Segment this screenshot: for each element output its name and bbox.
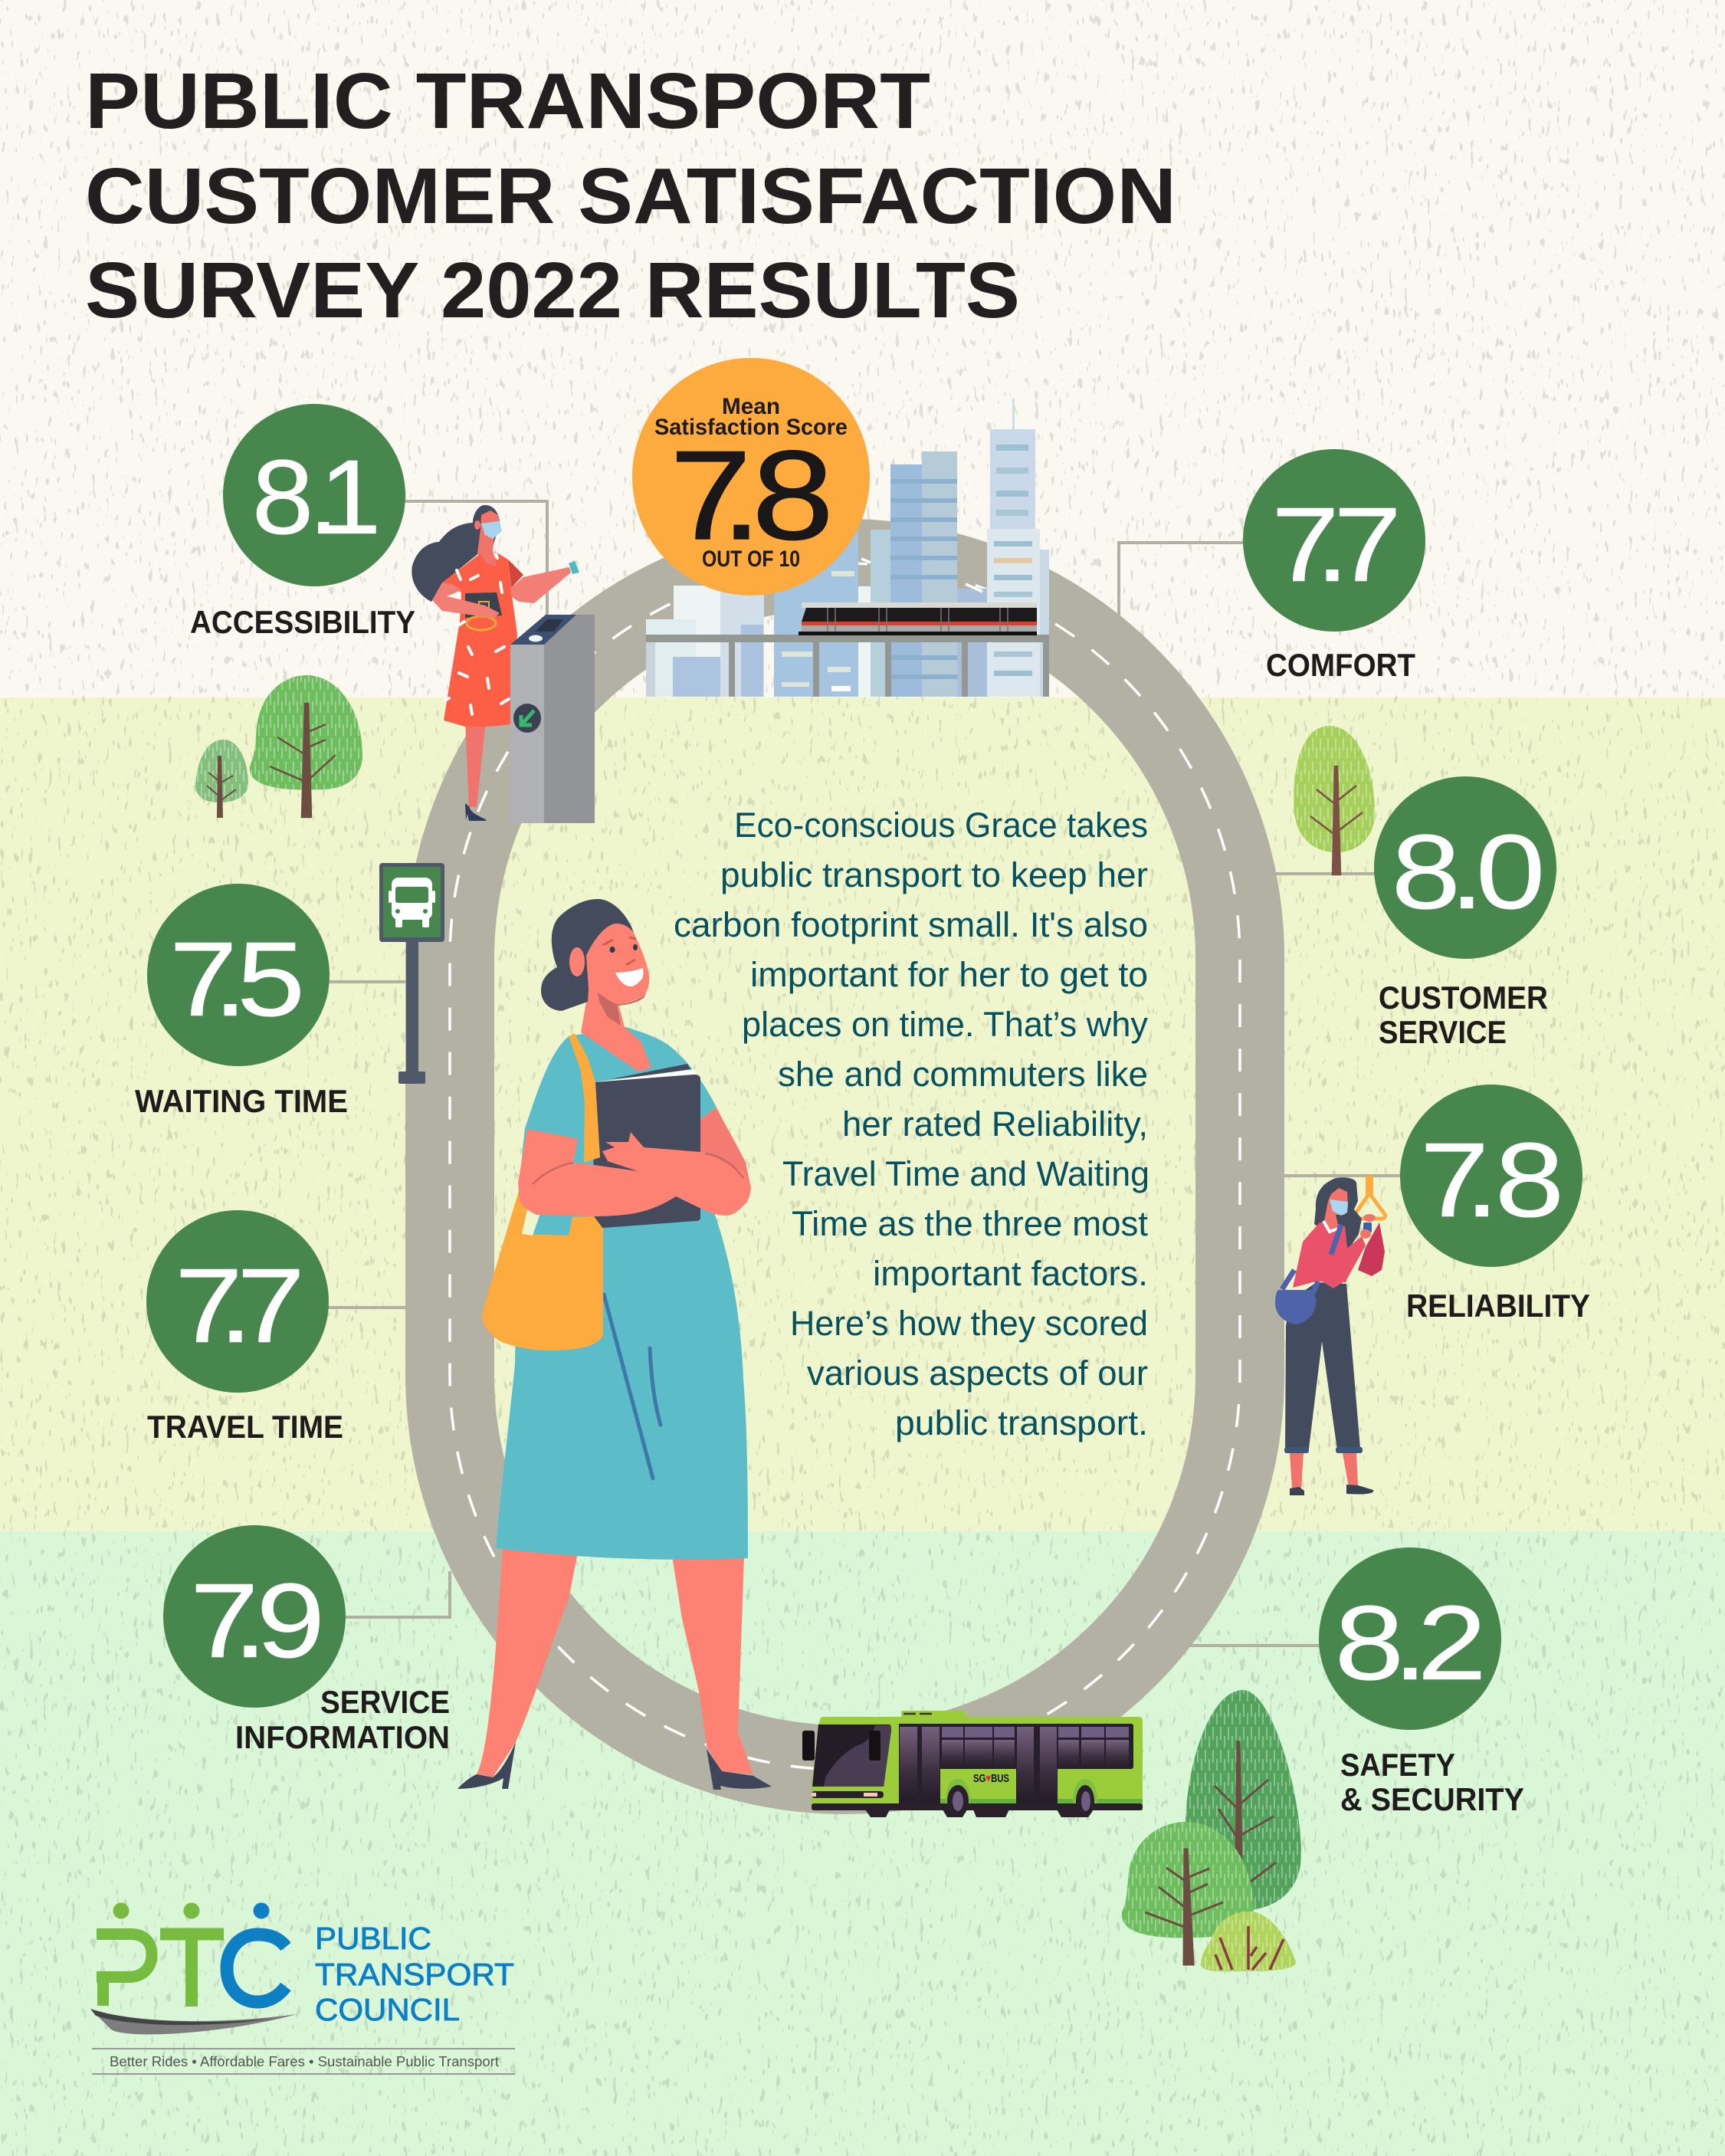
intro paragraph xyxy=(674,806,1149,1442)
neck and face xyxy=(581,924,651,1071)
intro paragraph: places on time. That’s why xyxy=(742,1005,1148,1044)
train xyxy=(799,602,1037,635)
strap handle xyxy=(1366,1176,1373,1195)
score: waiting time xyxy=(135,884,348,1119)
title: PUBLIC TRANSPORT xyxy=(85,57,930,145)
score: waiting time: 7.5 xyxy=(169,920,305,1039)
organisation name xyxy=(315,1921,514,2027)
tagline: Better Rides • Affordable Fares • Sustainable Public Transport xyxy=(110,2053,499,2069)
score: travel time: 7.7 xyxy=(175,1246,305,1365)
extended arm xyxy=(511,567,571,603)
score: safety and security xyxy=(1319,1547,1524,1817)
score: safety and security: 8.2 xyxy=(1335,1583,1487,1702)
score: customer service: 8.0 xyxy=(1392,812,1545,930)
face and mask xyxy=(1324,1188,1348,1232)
score: reliability: RELIABILITY xyxy=(1406,1288,1590,1324)
title: CUSTOMER SATISFACTION xyxy=(85,152,1176,240)
intro paragraph: carbon footprint small. It's also xyxy=(674,905,1148,944)
wheels xyxy=(946,1779,970,1803)
legs and shoes xyxy=(1290,1453,1358,1488)
shrub xyxy=(1201,1912,1296,1971)
red dress xyxy=(442,551,517,727)
bag xyxy=(569,1033,600,1163)
clutch and chain xyxy=(465,592,502,618)
intro paragraph: Travel Time and Waiting xyxy=(782,1154,1149,1193)
tree right of customer service xyxy=(1294,726,1375,875)
body xyxy=(812,1717,1143,1810)
shoes xyxy=(457,1742,516,1789)
score: safety and security: SAFETY xyxy=(1340,1747,1455,1783)
connector lines xyxy=(328,501,1402,1646)
intro paragraph: Here’s how they scored xyxy=(790,1304,1148,1343)
elevated rail track xyxy=(646,635,1049,697)
dress xyxy=(496,1027,748,1560)
score: safety and security: & SECURITY xyxy=(1340,1781,1524,1817)
score: accessibility xyxy=(190,404,415,640)
arms xyxy=(700,1108,751,1188)
score: customer service: SERVICE xyxy=(1379,1014,1507,1050)
trees left xyxy=(195,675,362,817)
logo mark xyxy=(90,1902,297,2034)
city skyline with elevated train xyxy=(646,399,1049,697)
score: service information: 7.9 xyxy=(190,1561,325,1679)
shoe xyxy=(465,803,487,821)
score: customer service xyxy=(1374,776,1556,1050)
score: travel time: TRAVEL TIME xyxy=(147,1409,343,1445)
hand and phone xyxy=(1363,1222,1372,1232)
intro paragraph: her rated Reliability, xyxy=(842,1104,1148,1144)
PTC logo xyxy=(90,1902,515,2075)
organisation name: COUNCIL xyxy=(315,1992,460,2027)
neck and face xyxy=(477,510,500,566)
score: service information: INFORMATION xyxy=(235,1719,450,1755)
SG bus logo text: SG♥BUS xyxy=(973,1772,1009,1785)
tall tree xyxy=(1186,1690,1301,1910)
hair xyxy=(412,505,500,602)
commuter holding strap xyxy=(1275,1176,1385,1495)
back sleeve xyxy=(1358,1222,1385,1276)
card xyxy=(569,561,579,574)
road loop xyxy=(450,563,1240,1770)
score: reliability: 7.8 xyxy=(1420,1121,1564,1239)
mean satisfaction score badge: 7.8 xyxy=(670,424,834,566)
mean satisfaction score badge: Satisfaction Score xyxy=(654,415,848,440)
intro paragraph: Eco-conscious Grace takes xyxy=(734,806,1148,845)
bus xyxy=(802,1711,1143,1817)
score: comfort: 7.7 xyxy=(1271,485,1402,604)
woman at fare gate xyxy=(412,505,579,821)
hair xyxy=(541,899,634,1011)
dress fold lines xyxy=(604,1295,661,1478)
title: SURVEY 2022 RESULTS xyxy=(85,246,1020,334)
legs xyxy=(465,720,486,807)
folder xyxy=(611,1064,690,1079)
intro paragraph: public transport to keep her xyxy=(720,855,1148,894)
medium tree xyxy=(1122,1822,1254,1964)
organisation name: PUBLIC xyxy=(315,1921,431,1956)
mirrors xyxy=(802,1731,815,1761)
mean satisfaction score badge: OUT OF 10 xyxy=(702,546,800,572)
score: comfort xyxy=(1243,449,1425,683)
score: waiting time: WAITING TIME xyxy=(135,1083,348,1119)
score: service information xyxy=(163,1525,450,1755)
hair xyxy=(1314,1177,1362,1249)
score: customer service: CUSTOMER xyxy=(1379,980,1548,1016)
trees lower right xyxy=(1122,1690,1301,1971)
intro paragraph: public transport. xyxy=(895,1403,1148,1442)
score: comfort: COMFORT xyxy=(1266,647,1415,683)
mean satisfaction score badge: Mean xyxy=(722,394,780,419)
mean satisfaction score badge xyxy=(632,358,870,596)
large tree xyxy=(250,675,362,817)
intro paragraph: important factors. xyxy=(873,1254,1148,1293)
bus stop sign xyxy=(379,863,444,1084)
doors xyxy=(899,1724,940,1805)
trousers xyxy=(1285,1282,1360,1450)
score: travel time xyxy=(146,1210,343,1445)
windshield xyxy=(812,1724,891,1787)
organisation name: TRANSPORT xyxy=(315,1957,514,1992)
smile and eyes xyxy=(615,968,643,986)
legs xyxy=(477,1548,579,1777)
intro paragraph: Time as the three most xyxy=(792,1204,1148,1243)
intro paragraph: she and commuters like xyxy=(778,1055,1148,1094)
score: accessibility: 8.1 xyxy=(252,438,381,556)
intro paragraph: various aspects of our xyxy=(807,1354,1148,1393)
blue shoulder bag xyxy=(1282,1225,1341,1295)
intro paragraph: important for her to get to xyxy=(750,955,1148,994)
title xyxy=(85,57,1176,334)
score: reliability xyxy=(1400,1085,1590,1324)
sweater xyxy=(1293,1222,1347,1288)
small tree xyxy=(195,740,248,817)
fare gate xyxy=(510,615,595,823)
Grace, main character xyxy=(457,899,772,1790)
icon: bus xyxy=(389,878,435,927)
score: service information: SERVICE xyxy=(320,1684,450,1720)
windows xyxy=(899,1724,1133,1769)
score: accessibility: ACCESSIBILITY xyxy=(190,604,415,640)
underside xyxy=(865,1810,1094,1817)
bent arm xyxy=(432,582,500,618)
face mask xyxy=(481,521,502,539)
